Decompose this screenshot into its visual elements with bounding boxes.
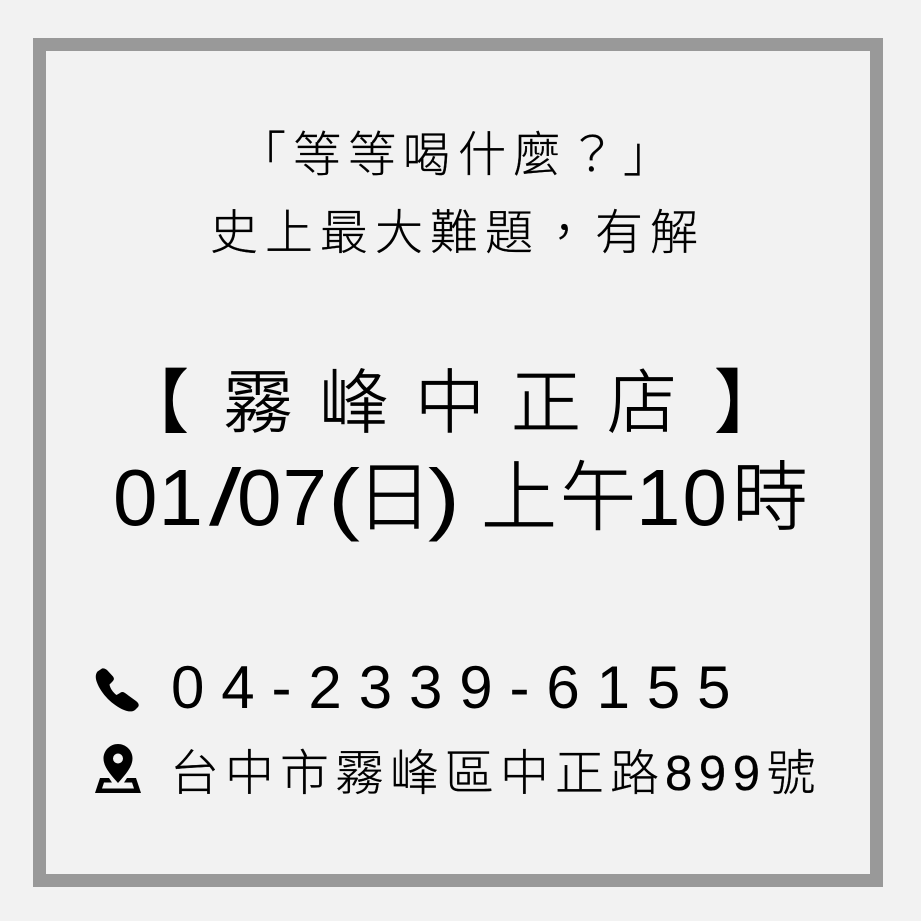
store name: 【 霧峰中正店】	[119, 364, 784, 442]
address: 台中市霧峰區中正路899號	[170, 747, 822, 801]
heading line 1: 「等等喝什麼？」	[238, 129, 678, 182]
date and time	[113, 453, 808, 542]
date and time: (	[328, 453, 360, 542]
icon: phone	[96, 668, 139, 712]
date and time: 07	[237, 453, 328, 542]
date and time: 01	[113, 453, 204, 542]
date and time: 時	[732, 456, 808, 541]
date and time: 上午	[481, 456, 639, 541]
date and time: 10	[636, 453, 729, 542]
date and time: 日	[356, 456, 432, 541]
heading line 2: 史上最大難題，有解	[210, 207, 705, 260]
date and time: /	[209, 453, 241, 542]
date and time: )	[428, 453, 460, 542]
phone number: 04-2339-6155	[171, 654, 747, 721]
icon: map pin	[95, 744, 141, 793]
